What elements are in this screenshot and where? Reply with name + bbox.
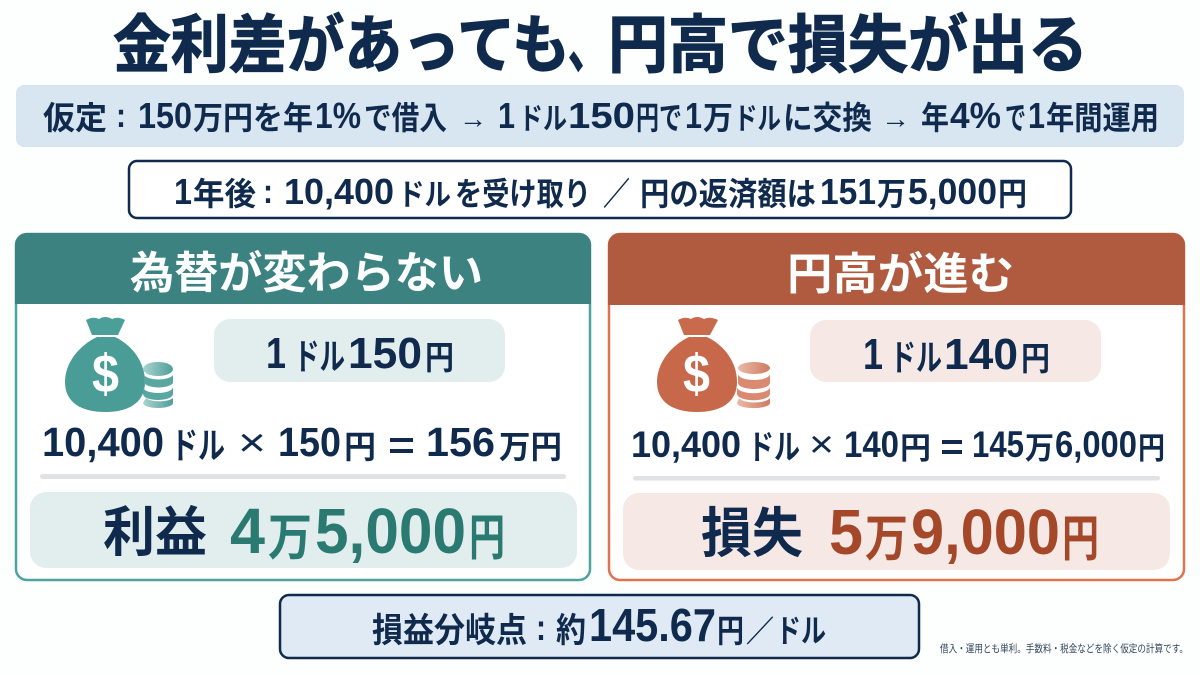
assumption band: →	[459, 103, 487, 134]
break-even callout: 円	[717, 613, 744, 649]
formula: 145 man 6000 yen	[631, 424, 1165, 467]
break-even callout: 145.67	[589, 599, 716, 651]
rate pill: 150 yen: ドル	[294, 336, 345, 377]
assumption band: 仮定	[43, 100, 107, 136]
assumption band: 150	[568, 95, 635, 136]
assumption band: 150	[138, 95, 192, 136]
formula: 156 man yen: 150	[278, 419, 341, 465]
result after one year: 10,400	[284, 171, 394, 212]
outcome: profit: 4	[230, 495, 265, 567]
assumption band: で	[1005, 100, 1026, 136]
title: 金利差があっても	[113, 11, 570, 81]
result after one year: 円の返済額は	[640, 176, 816, 212]
outcome: loss: 損失	[701, 504, 803, 564]
assumption band	[16, 85, 1184, 147]
formula: 145 man 6000 yen: 140	[844, 424, 899, 465]
break-even callout: 約	[556, 612, 586, 650]
assumption band: :	[116, 97, 126, 135]
header title: unchanged: 為替が変わらない	[130, 249, 483, 298]
rate pill: 140 yen: 1	[863, 330, 883, 379]
outcome: loss: 9,000	[911, 496, 1060, 568]
outcome: profit: 万	[268, 510, 312, 566]
outcome: profit: 利益	[103, 503, 207, 563]
rate pill: 140 yen: 円	[1021, 340, 1050, 377]
formula: 145 man 6000 yen: ドル	[748, 429, 800, 467]
icon: money bag red	[657, 317, 770, 412]
formula: 156 man yen: 万円	[499, 429, 562, 465]
result after one year: を受け取り	[455, 176, 591, 212]
assumption band: 4%	[950, 95, 1001, 136]
rate pill: 140 yen: ドル	[890, 337, 942, 378]
formula: 156 man yen: ドル	[171, 425, 225, 466]
formula: 145 man 6000 yen: 10,400	[631, 424, 741, 465]
result after one year: 円	[998, 176, 1027, 212]
break-even callout: :	[536, 607, 546, 648]
title: 、	[568, 11, 608, 81]
panel: yen appreciation	[608, 233, 1185, 580]
icon: money bag red: $	[683, 344, 710, 404]
assumption band: 1	[1028, 95, 1045, 136]
result after one year: :	[263, 173, 273, 211]
assumption band: ドル	[519, 103, 567, 136]
result after one year: 5,000	[908, 171, 997, 212]
break-even callout: ドル	[776, 613, 826, 649]
result after one year: 1	[174, 171, 192, 212]
assumption band: 万	[703, 100, 733, 136]
rate pill: 150 yen: 150	[348, 329, 422, 378]
rate pill: 140 yen: 140	[944, 330, 1018, 379]
assumption band: 1%	[315, 95, 361, 136]
formula: 145 man 6000 yen: 6,000	[1055, 424, 1137, 465]
rate pill: 140 yen	[810, 320, 1101, 382]
title: 円高で損失が出る	[608, 11, 1088, 81]
formula: 145 man 6000 yen: 145	[972, 424, 1024, 465]
formula: 156 man yen: 10,400	[42, 419, 164, 465]
panel header: yen appreciation	[608, 233, 1185, 305]
rate pill: 150 yen: 1	[266, 329, 286, 378]
assumption band: に交換	[783, 100, 872, 136]
result after one year: ドル	[398, 179, 451, 212]
break-even callout: 損益分岐点	[372, 612, 527, 650]
formula: 156 man yen: ×	[238, 421, 266, 465]
formula: 145 man 6000 yen: 万	[1025, 431, 1054, 466]
formula: 156 man yen: 円	[344, 429, 376, 465]
panel header: unchanged	[15, 233, 591, 304]
assumption band: で借入	[364, 100, 447, 136]
outcome: profit: 5,000	[315, 495, 466, 567]
assumption band: 円で	[636, 100, 682, 136]
rate pill: 150 yen: 円	[425, 339, 454, 376]
outcome: loss	[623, 493, 1170, 570]
result after one year: 年後	[193, 176, 256, 212]
assumption band: 万円を年	[193, 100, 313, 136]
icon: money bag teal	[65, 317, 173, 412]
formula: 145 man 6000 yen: ×	[809, 424, 834, 466]
result after one year: 151	[820, 171, 876, 212]
formula: 145 man 6000 yen: 円	[900, 431, 931, 466]
outcome: loss: 万	[865, 511, 908, 567]
formula: 145 man 6000 yen: 円	[1138, 431, 1165, 466]
title	[113, 11, 1088, 81]
assumption band: 1	[685, 95, 702, 136]
assumption band: →	[881, 103, 910, 134]
result after one year: ／	[603, 176, 630, 212]
icon: money bag teal: $	[92, 344, 119, 404]
assumption band: 年間運用	[1046, 100, 1159, 136]
break-even callout	[280, 595, 919, 658]
formula: 156 man yen	[42, 419, 562, 466]
result after one year	[129, 161, 1071, 218]
formula: 156 man yen: 156	[426, 419, 495, 465]
outcome: profit	[30, 492, 577, 568]
outcome: profit: 円	[469, 510, 505, 566]
outcome: loss: 円	[1062, 511, 1099, 567]
outcome: loss: 5	[829, 496, 863, 568]
assumption band: ドル	[734, 103, 781, 136]
assumption band: 年	[921, 100, 949, 136]
header title: yen appreciation: 円高が進む	[787, 250, 1014, 299]
result after one year: 万	[877, 176, 906, 212]
break-even callout: ／	[746, 616, 774, 649]
rate pill: 150 yen	[214, 319, 505, 382]
assumption band: 1	[498, 95, 515, 136]
panel: exchange rate unchanged	[15, 233, 591, 580]
